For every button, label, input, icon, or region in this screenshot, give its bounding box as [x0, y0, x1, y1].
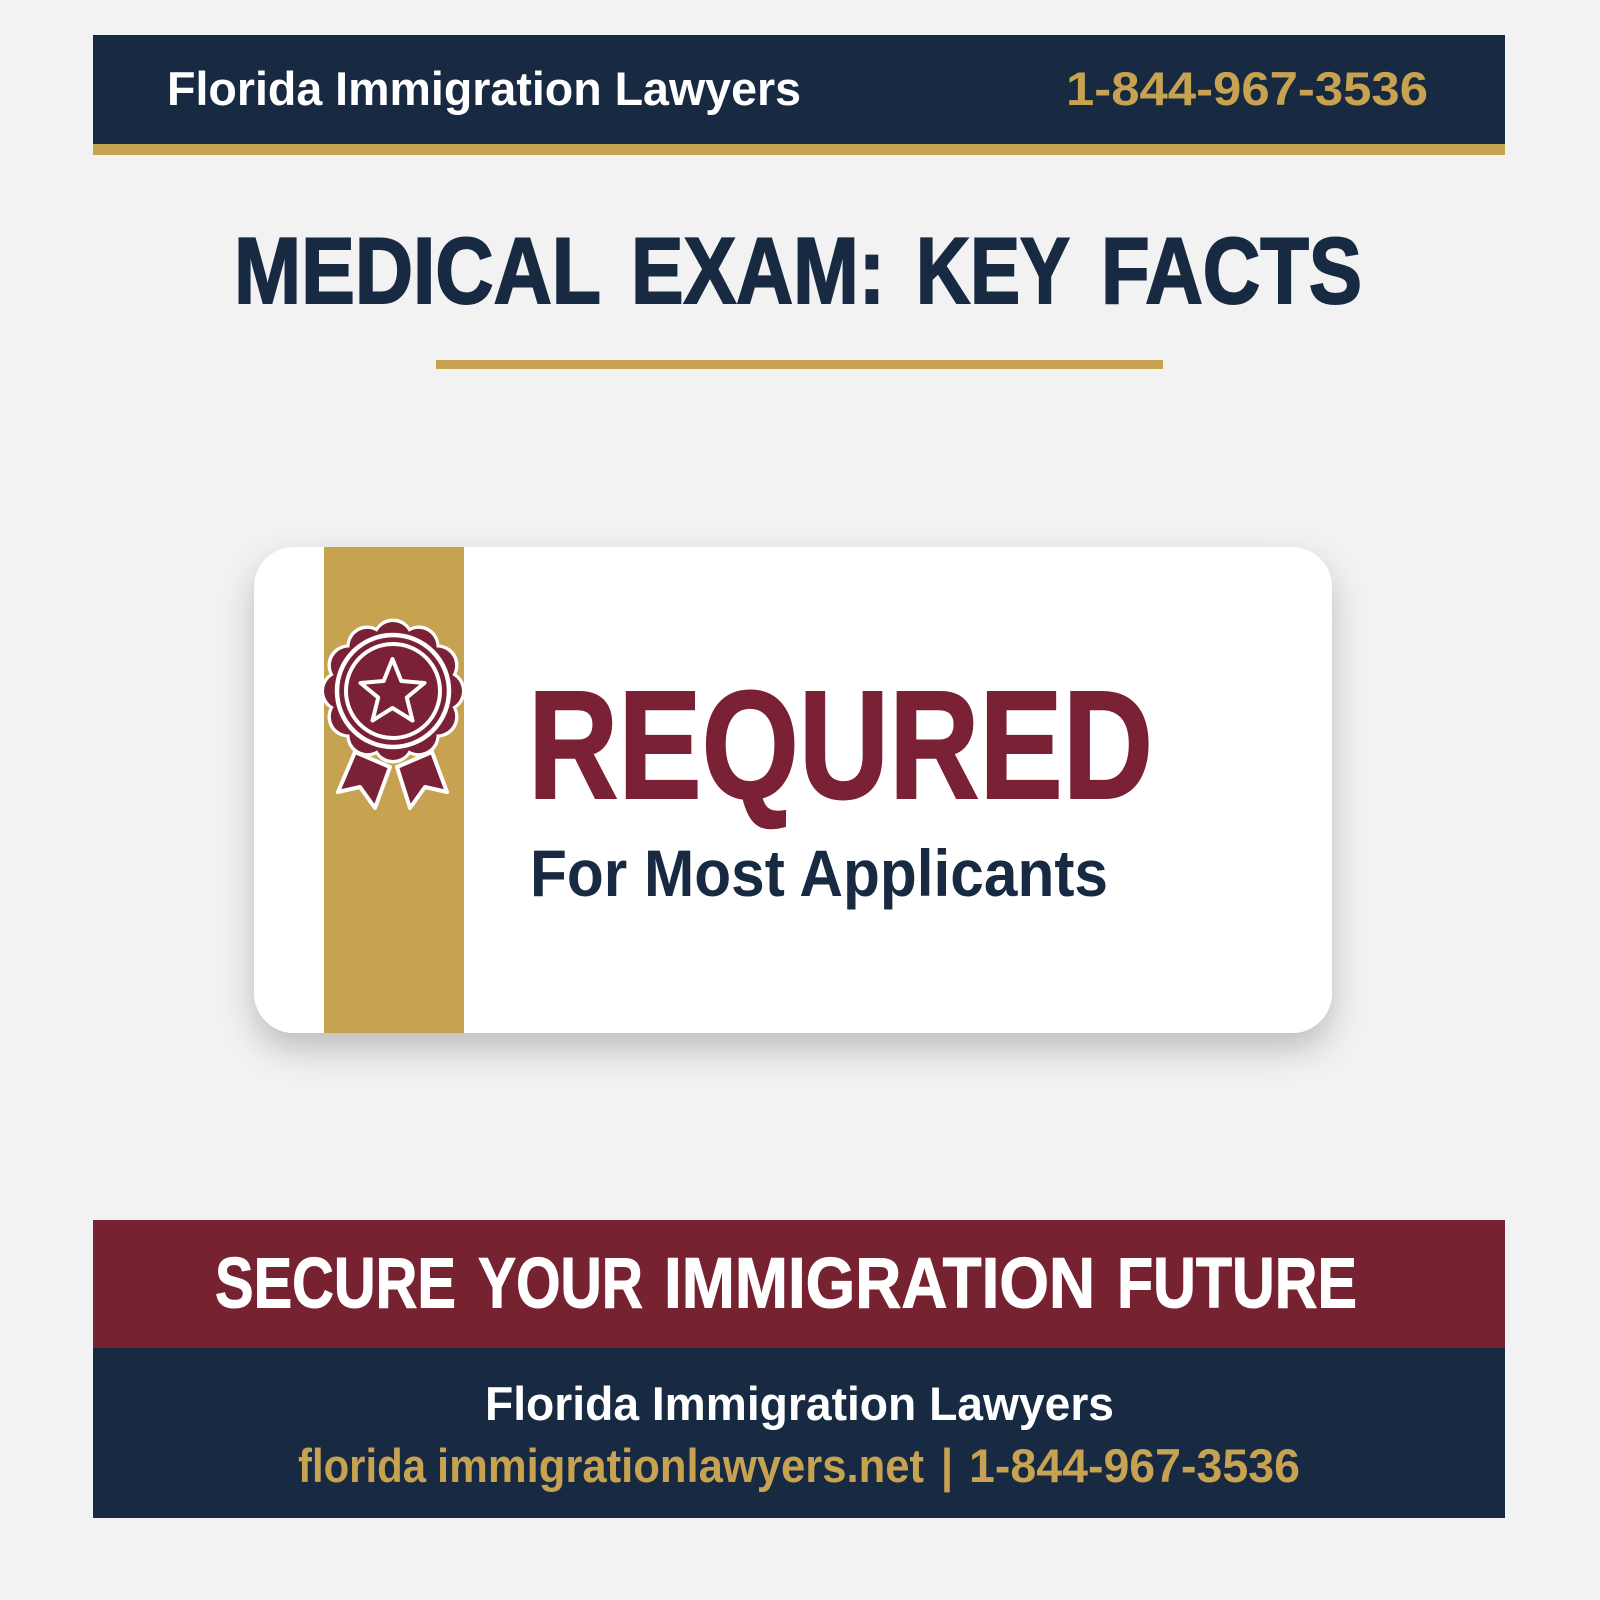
call to action banner — [93, 1220, 1505, 1348]
banner text: YOUR — [478, 1244, 643, 1324]
banner text: SECURE — [215, 1244, 456, 1324]
footer website and phone: | — [941, 1439, 953, 1492]
title — [234, 218, 1362, 323]
banner text: IMMIGRATION — [664, 1244, 1095, 1324]
banner text: FUTURE — [1117, 1244, 1357, 1324]
title underline — [436, 360, 1163, 369]
panel: required card — [254, 547, 1332, 1033]
footer panel — [93, 1348, 1505, 1518]
header bar — [93, 35, 1505, 155]
footer website and phone — [298, 1439, 1300, 1492]
required subtext: For Most Applicants — [530, 836, 1108, 910]
footer website and phone: florida — [298, 1439, 427, 1492]
footer website and phone: 1-844-967-3536 — [969, 1439, 1300, 1492]
title: FACTS — [1101, 218, 1362, 323]
title: MEDICAL — [234, 218, 601, 323]
required headline: REQURED — [528, 659, 1153, 831]
banner text — [215, 1244, 1357, 1324]
gold ribbon stripe — [324, 547, 464, 1033]
title: EXAM: — [631, 218, 885, 323]
footer firm name: Florida Immigration Lawyers — [485, 1377, 1114, 1430]
title: KEY — [916, 218, 1070, 323]
icon: award seal with star — [320, 618, 466, 808]
footer website and phone: immigrationlawyers.net — [437, 1439, 924, 1492]
header firm name: Florida Immigration Lawyers — [167, 62, 801, 115]
header phone number: 1-844-967-3536 — [1066, 62, 1428, 115]
